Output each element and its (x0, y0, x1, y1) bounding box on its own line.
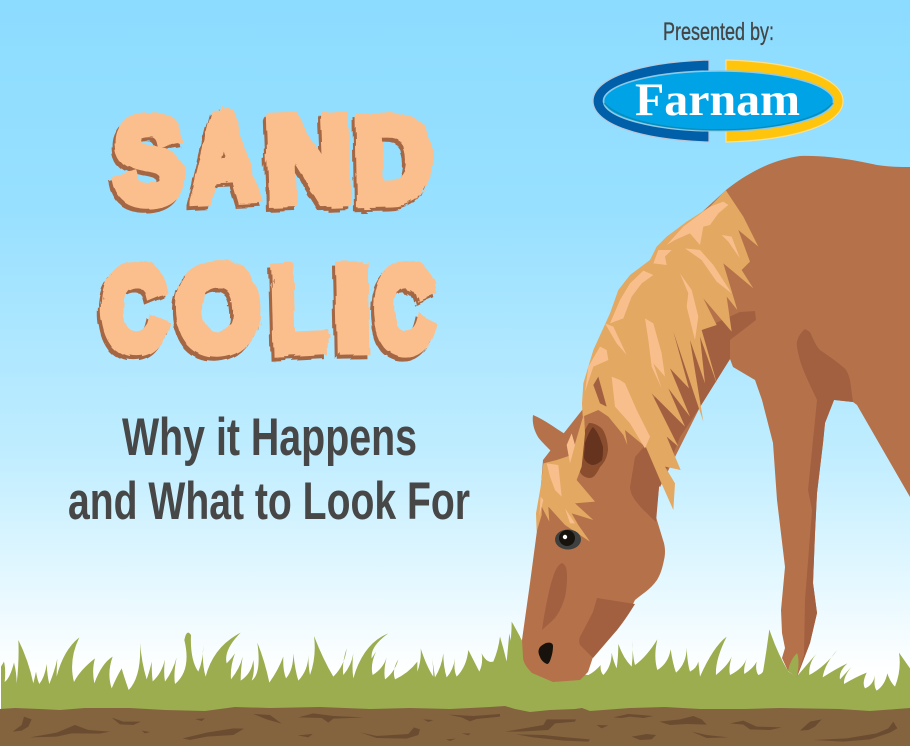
title: Sand Colic: I (333, 243, 371, 375)
mane dark patch (593, 377, 607, 407)
title: Sand Colic: O (174, 241, 261, 377)
grass (1, 622, 910, 720)
title: Sand Colic: N (264, 93, 353, 227)
logo: Farnam: Farnam (635, 74, 800, 126)
nostril (538, 643, 553, 664)
head (522, 400, 665, 682)
mane highlights (585, 202, 740, 448)
grass blade in front of hoof (788, 653, 798, 677)
title: Sand Colic: L (270, 242, 326, 376)
title: Sand Colic: S (113, 94, 185, 228)
forelock (536, 413, 595, 542)
presented by label: Presented by: (663, 18, 774, 46)
mane (582, 190, 758, 510)
subtitle: Why it Happens (122, 408, 417, 467)
logo: Farnam (593, 60, 843, 142)
horse body and foreleg (630, 156, 910, 677)
eye (555, 530, 581, 550)
title: Sand Colic: C (100, 243, 168, 377)
ear (533, 415, 565, 452)
soil (0, 706, 910, 746)
neck shadow (640, 311, 756, 487)
subtitle: and What to Look For (68, 472, 470, 531)
title: Sand Colic: D (354, 92, 433, 226)
title: Sand Colic: A (190, 91, 258, 225)
inner ear (578, 423, 608, 478)
title: Sand Colic: C (373, 242, 435, 377)
foreleg shadow (797, 400, 834, 677)
cheek marking (542, 563, 567, 630)
subtitle (68, 408, 470, 531)
jaw neck shadow (630, 440, 670, 522)
shoulder shadow (797, 329, 853, 402)
horse (522, 156, 910, 682)
forelock highlights (539, 433, 575, 523)
jaw shadow (579, 598, 635, 658)
soil marks (13, 713, 500, 741)
title: Sand Colic (100, 91, 435, 377)
